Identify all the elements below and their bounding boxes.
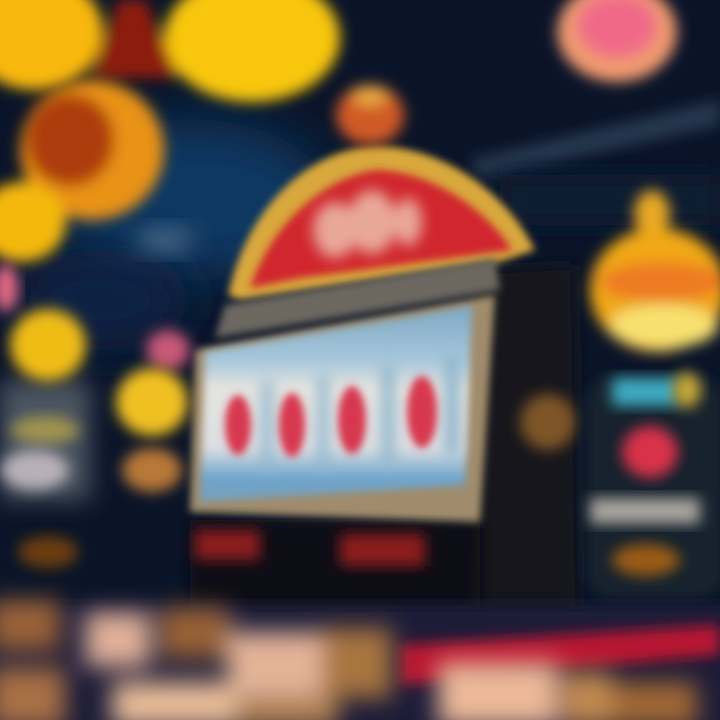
icon: yellow bell cluster top left	[0, 0, 340, 102]
dome rim	[228, 146, 535, 300]
reel symbols	[225, 376, 437, 457]
dome red panel	[250, 170, 512, 288]
floor: checkered table	[0, 600, 720, 720]
marquee bar	[215, 258, 500, 338]
top ball	[336, 85, 404, 145]
base red lights	[195, 530, 425, 566]
icon: pink lamp top right	[557, 0, 677, 82]
screen frame	[190, 295, 495, 522]
reels shading	[262, 355, 459, 470]
left small machines	[0, 264, 190, 568]
machine body	[465, 265, 580, 610]
slot machine	[190, 85, 580, 610]
screen	[200, 306, 472, 502]
base	[190, 520, 480, 610]
right lamp	[590, 190, 720, 352]
right slot machine	[585, 372, 720, 600]
dome white symbol	[313, 190, 422, 258]
lever knob	[520, 394, 576, 450]
icon: orange ball	[0, 80, 164, 262]
